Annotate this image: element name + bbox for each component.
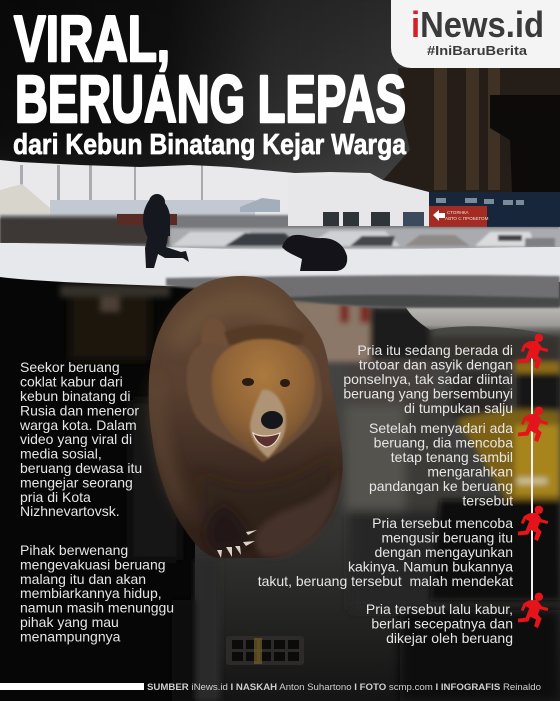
text: authorities: mengevakuasi beruang (20, 556, 166, 572)
bear right arm (256, 470, 340, 557)
icon: red runner 2 (518, 407, 548, 442)
timeline text 3: dengan mengayunkan (374, 544, 513, 560)
logo: iNews.id (391, 0, 560, 68)
timeline text 4: dikejar oleh beruang (386, 630, 513, 646)
text: introduction: Nizhnevartovsk. (20, 503, 120, 519)
photo: storm drain grate (226, 636, 304, 665)
timeline text 1: trotoar dan asyik dengan (359, 356, 513, 372)
parking lot (0, 215, 560, 248)
blue building (429, 188, 560, 227)
text: introduction: coklat kabur dari (20, 374, 123, 390)
bear fur shading (153, 288, 335, 537)
title: dari Kebun Binatang Kejar Warga (13, 129, 407, 161)
bear muzzle (250, 390, 286, 458)
red road sign: АВТО С ПРОБЕГОМ (445, 216, 489, 221)
timeline line (531, 355, 533, 603)
timeline text 1: Pria itu sedang berada di (357, 342, 513, 358)
bear brow ridge (224, 325, 305, 346)
icon: red runner 4 (518, 593, 548, 628)
bear mouth (253, 433, 280, 447)
logo: iNews.id: iNews.id (411, 4, 544, 45)
text: introduction: Seekor beruang (20, 359, 120, 375)
text: introduction: media sosial, (20, 446, 102, 462)
timeline text 4 (366, 601, 513, 646)
photo: small bear in snow (282, 235, 347, 271)
text: introduction (19, 359, 142, 519)
text: authorities (20, 542, 174, 644)
text: authorities: menampungnya (20, 628, 121, 644)
timeline text 2: tersebut (462, 492, 513, 508)
title: VIRAL, (14, 2, 170, 75)
logo: iNews.id: #IniBaruBerita (427, 43, 528, 58)
timeline text 1: beruang yang bersembunyi (343, 386, 513, 402)
bear ears (201, 319, 321, 365)
text: introduction: video yang viral di (20, 431, 132, 447)
snow bank (0, 243, 560, 286)
white building (288, 176, 429, 226)
photo: running man (143, 194, 189, 268)
bear eyes (242, 378, 290, 387)
photo: fading pale band under the road (405, 306, 560, 338)
bear claws (217, 530, 257, 558)
distant roof (240, 198, 280, 212)
timeline text 1: ponselnya, tak sadar diintai (343, 371, 513, 387)
text: introduction: mengejar seorang (20, 474, 133, 490)
bear neck ruff (187, 342, 322, 462)
timeline text 3: takut, beruang tersebut malah mendekat (258, 573, 513, 589)
text: introduction: Rusia dan meneror (20, 402, 139, 418)
sky (0, 160, 560, 250)
text: introduction: warga kota. Dalam (19, 417, 137, 433)
text: introduction: beruang dewasa itu (20, 460, 142, 476)
photo: snowy parking lot scene (0, 160, 560, 308)
banner (50, 200, 255, 217)
timeline text 3 (258, 515, 513, 589)
timeline text 2: Setelah menyadari ada (369, 420, 513, 436)
red road sign (429, 206, 489, 227)
text: authorities: membiarkannya hidup, (20, 585, 162, 601)
upper right building (383, 68, 560, 192)
timeline text 4: Pria tersebut lalu kabur, (366, 601, 513, 617)
footer bar (0, 683, 144, 690)
icon: red runner 1 (518, 334, 548, 369)
timeline text 4: berlari secepatnya dan (371, 616, 513, 632)
timeline text 3: Pria tersebut mencoba (372, 515, 513, 531)
text: authorities: pihak yang mau (20, 614, 119, 630)
timeline text 3: mengusir beruang itu (381, 530, 513, 546)
large brown bear (149, 276, 343, 558)
icon: red runner 3 (518, 506, 548, 541)
footer credits: SUMBER iNews.id I NASKAH Anton Suhartono I FOTO scmp.com I INFOGRAFIS Reinaldo (147, 681, 541, 692)
title (13, 2, 407, 161)
text: authorities: malang itu dan akan (20, 571, 146, 587)
timeline text 2 (369, 420, 513, 508)
timeline text 1 (343, 342, 513, 416)
timeline text 2: mengarahkan (427, 464, 513, 480)
photo: dark street lower background (0, 280, 560, 701)
bear nose (261, 411, 283, 429)
timeline text 3: kakinya. Namun bukannya (348, 558, 513, 574)
timeline text 2: beruang, dia mencoba (374, 434, 513, 450)
red road sign: СТОЯНКА (447, 210, 470, 215)
text: authorities: namun masih menunggu (20, 600, 174, 616)
timeline text 2: tetap tenang sambil (391, 449, 513, 465)
timeline text 1: di tumpukan salju (404, 400, 513, 416)
timeline text 2: pandangan ke beruang (369, 478, 513, 494)
tent (0, 184, 50, 216)
text: introduction: kebun binatang di (20, 388, 131, 404)
dirty slush (166, 275, 560, 308)
text: authorities: Pihak berwenang (20, 542, 128, 558)
photo: clouds and building upper right (0, 0, 560, 192)
parked cars (170, 228, 560, 248)
bear face (212, 339, 315, 460)
bear front leg (207, 505, 250, 552)
bear body (149, 276, 343, 558)
lamp posts (20, 165, 203, 243)
text: introduction: pria di Kota (20, 489, 91, 505)
